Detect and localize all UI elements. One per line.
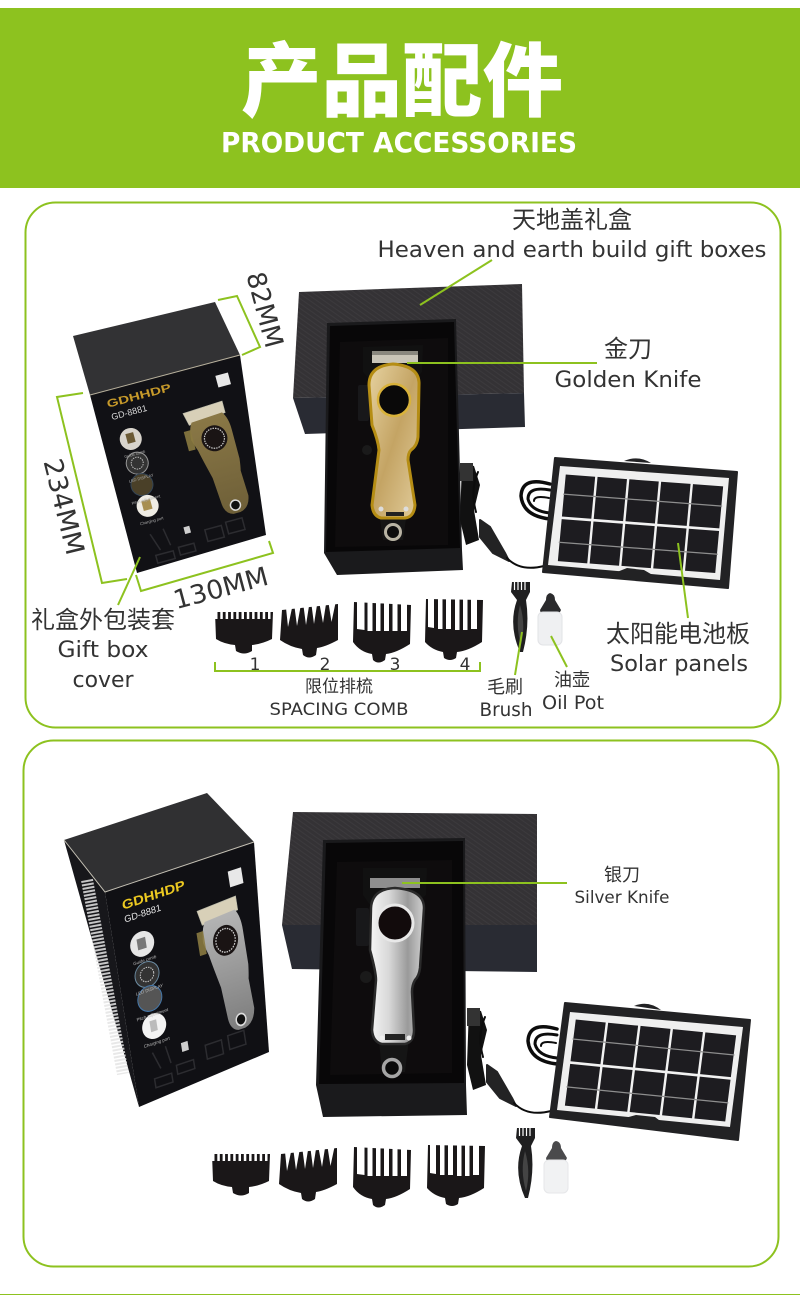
box feature icons: Charging port: [139, 515, 165, 526]
label: golden knife: [407, 336, 702, 393]
box feature icons: Pitch adjustment: [131, 493, 162, 506]
solar panel, silver: [550, 1003, 750, 1140]
label: golden knife: Golden Knife: [554, 367, 702, 393]
comb numbers: [250, 655, 470, 675]
comb bracket: [215, 662, 480, 671]
panel: silver knife set: [24, 740, 778, 1266]
panel: gold knife set: [26, 202, 780, 728]
label: gift box cover: 礼盒外包装套: [31, 607, 175, 634]
box feature icons: Guide comb: [124, 449, 147, 459]
heaven and earth gift box, silver: [282, 812, 537, 1117]
box feature icons: LED DISPLAY: [135, 983, 163, 997]
label: oil pot: 油壶: [554, 670, 590, 690]
brush, silver set: [516, 1128, 535, 1198]
box feature icons: [124, 926, 174, 1050]
box brand text: GDHHDP: [106, 382, 172, 411]
label: spacing comb: SPACING COMB: [270, 700, 408, 720]
label: silver knife: Silver Knife: [574, 888, 670, 908]
label: brush: 毛刷: [487, 677, 523, 697]
silver clipper: [356, 868, 427, 1076]
dimension: 234MM: 234MM: [37, 456, 89, 558]
adapter and cable, silver: [467, 1008, 557, 1113]
dimension: 234MM: [37, 393, 127, 583]
box feature icons: [113, 425, 167, 527]
label: gift boxes: 天地盖礼盒: [512, 207, 632, 234]
label: gift boxes: Heaven and earth build gift boxes: [378, 237, 766, 263]
solar panel: [543, 458, 737, 588]
comb numbers: 1: [250, 655, 260, 675]
box faint accessories: [150, 508, 248, 563]
box side text: [87, 880, 123, 1074]
label: gift box cover: cover: [72, 667, 134, 693]
spacing combs, silver set: [212, 1144, 485, 1208]
label: golden knife: 金刀: [604, 336, 652, 363]
label: gift box cover: Gift box: [58, 637, 148, 663]
label: solar panels: 太阳能电池板: [606, 621, 750, 648]
golden clipper: [358, 345, 423, 540]
dimension: 130MM: [136, 541, 273, 616]
dimension: 82MM: [218, 269, 288, 355]
comb numbers: 4: [460, 655, 470, 675]
adapter and cable: [460, 463, 550, 568]
oil pot, silver set: [544, 1141, 568, 1193]
label: brush: [480, 632, 532, 721]
box USB badge: [215, 373, 231, 388]
gift box outer cover, silver: [64, 793, 270, 1107]
label: spacing comb: 限位排梳: [305, 677, 373, 696]
brush: [511, 582, 530, 652]
box feature icons: Pitch adjustment: [136, 1007, 169, 1022]
gift box outer cover: [73, 302, 271, 573]
label: brush: Brush: [480, 699, 532, 721]
box feature icons: Guide comb: [133, 954, 157, 966]
spacing combs: [215, 598, 483, 662]
heaven and earth gift box: [293, 284, 525, 575]
label: oil pot: Oil Pot: [542, 692, 604, 714]
box model text: GD-8881: [110, 403, 148, 422]
box USB badge: [228, 867, 243, 887]
box model text: GD-8881: [124, 903, 162, 926]
label: silver knife: 银刀: [604, 865, 640, 885]
box brand text: GDHHDP: [121, 877, 186, 913]
box faint accessories: [150, 1020, 248, 1088]
dimension: 82MM: 82MM: [240, 269, 288, 351]
label: oil pot: [542, 636, 604, 714]
box clipper picture: [193, 895, 258, 1038]
oil pot: [538, 593, 562, 645]
label: solar panels: [606, 543, 750, 677]
title: English: PRODUCT ACCESSORIES: [221, 127, 577, 159]
label: gift box cover: [31, 557, 175, 693]
comb numbers: 2: [320, 655, 330, 675]
comb numbers: 3: [390, 655, 400, 675]
title: Chinese: 产品配件: [241, 38, 563, 128]
header banner: [0, 8, 800, 188]
box feature icons: Charging port: [143, 1035, 171, 1049]
label: solar panels: Solar panels: [610, 651, 748, 677]
label: spacing comb: [270, 677, 408, 720]
label: silver knife: [402, 865, 670, 908]
box clipper picture: [179, 401, 253, 521]
box feature icons: LED DISPLAY: [128, 472, 155, 484]
label: gift boxes: [378, 207, 766, 305]
dimension: 130MM: 130MM: [170, 562, 272, 616]
